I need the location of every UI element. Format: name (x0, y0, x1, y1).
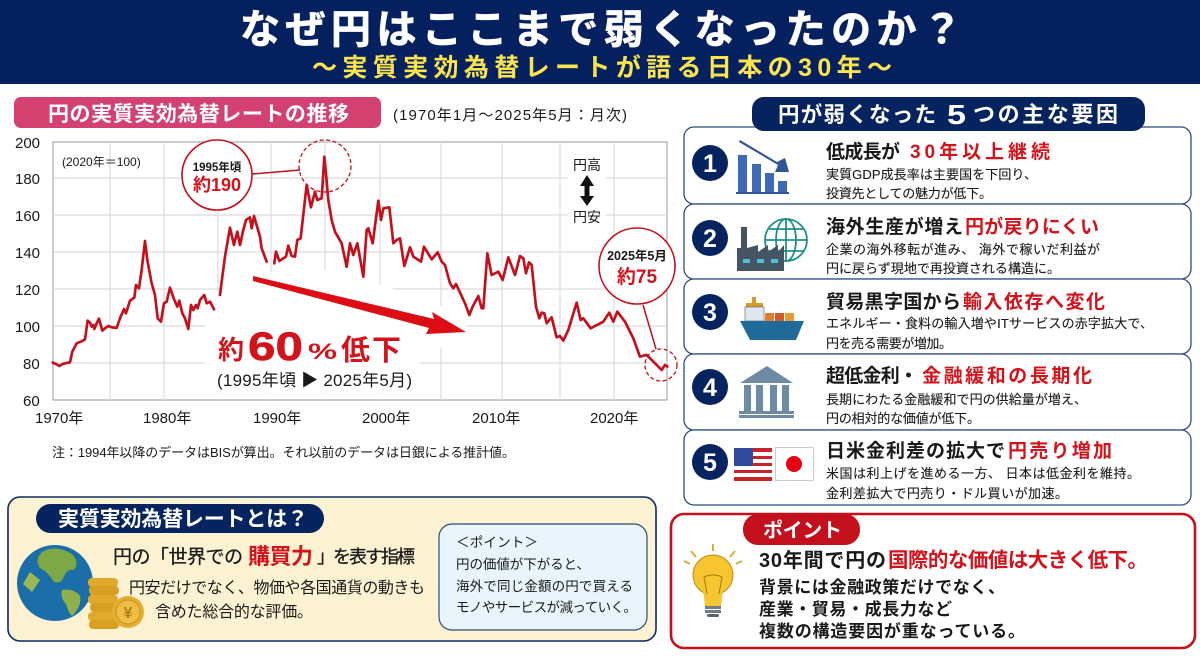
y axis labels: 200 (15, 135, 40, 152)
factor 2: 円に戻らず現地で再投資される構造に。 (826, 261, 1060, 276)
key point text: 国際的な価値は大きく低下。 (888, 549, 1148, 572)
factor 2: 2 (703, 225, 717, 253)
definition text: 円の「世界での (113, 546, 243, 568)
icon: cargo ship (740, 297, 804, 340)
factor 2 (684, 204, 1191, 279)
icon: yen coins (88, 578, 144, 629)
icon: light bulb (684, 544, 742, 617)
factor 3: 3 (703, 299, 717, 327)
callout: 2025 value: 約75 (617, 266, 657, 288)
definition text: 円安だけでなく、物価や各国通貨の動きも (129, 579, 425, 597)
factor 3: エネルギー・食料の輸入増やITサービスの赤字拡大で、 (826, 316, 1153, 331)
y axis labels: 180 (15, 171, 40, 188)
definition text (113, 544, 425, 621)
panel: key point (671, 514, 1195, 648)
y axis labels: 120 (15, 282, 40, 299)
x axis labels: 1970年 (35, 410, 83, 427)
title: なぜ円はここまで弱くなったのか？ (240, 8, 962, 52)
factor 2: 企業の海外移転が進み、 海外で稼いだ利益が (826, 242, 1100, 257)
icon: Japan flag (776, 448, 814, 480)
factor 1: 投資先としての魅力が低下。 (826, 186, 992, 201)
factor 3: 円を売る需要が増加。 (826, 336, 952, 351)
key point text: 背景には金融政策だけでなく、 (759, 577, 1005, 597)
callout: 60 percent drop (217, 325, 412, 390)
y axis labels: 60 (23, 393, 40, 410)
factor 3 (684, 279, 1191, 354)
x axis labels: 1980年 (143, 410, 191, 427)
callout: 2025 value: 2025年5月 (607, 248, 667, 263)
panel: point note (439, 524, 647, 630)
factor 2: 海外生産が増え (826, 215, 963, 238)
callout: 60 percent drop: (1995年頃 ▶ 2025年5月) (217, 371, 412, 390)
factor 4: 超低金利・ (826, 365, 918, 387)
definition text: 購買力 (248, 544, 313, 569)
factor 5 (684, 430, 1191, 505)
key point text: 30年間で円の (759, 549, 886, 572)
callout: 2025 value (599, 228, 677, 381)
chart heading (14, 97, 381, 128)
y axis labels: 80 (23, 356, 40, 373)
panel: five factors heading: 円が弱くなった (778, 102, 936, 127)
panel: point note: ＜ポイント＞ (456, 535, 538, 550)
factor 1: 1 (703, 150, 717, 178)
key point label (743, 514, 860, 545)
callout: 1995 peak: 約190 (193, 175, 241, 195)
factor 4: 4 (703, 374, 717, 402)
icon: bank (739, 366, 794, 418)
factor 5: 円売り増加 (1008, 440, 1112, 462)
definition text: 含めた総合的な評価。 (155, 603, 313, 621)
panel: five factors heading: 5 (947, 99, 966, 130)
factor 3: 貿易黒字国から (826, 291, 961, 313)
yen direction indicator: 円安 (573, 209, 601, 225)
factor 5: 5 (703, 449, 717, 477)
factor 3: 輸入依存へ変化 (963, 291, 1105, 313)
panel: point note: 円の価値が下がると、 (456, 557, 590, 572)
factor 4 (684, 354, 1191, 430)
y axis labels: 100 (15, 319, 40, 336)
x axis labels: 2020年 (590, 410, 638, 427)
icon: yen coins: ¥ (124, 605, 133, 622)
factor 1: 30年以上継続 (910, 140, 1050, 163)
x axis labels: 1990年 (253, 410, 301, 427)
x axis labels (35, 410, 638, 427)
data line (53, 157, 667, 370)
y axis labels: 160 (15, 208, 40, 225)
key point text (759, 549, 1148, 641)
yen direction indicator: 円高 (573, 157, 601, 173)
factor 4: 長期にわたる金融緩和で円の供給量が増え、 (826, 392, 1087, 407)
callout: 60 percent drop: 低下 (341, 334, 401, 367)
factor 1: 低成長が (826, 140, 900, 163)
x axis labels: 2000年 (362, 410, 410, 427)
factor 1: 実質GDP成長率は主要国を下回り、 (826, 167, 1037, 182)
x axis labels: 2010年 (472, 410, 520, 427)
factor 2: 円が戻りにくい (965, 215, 1099, 238)
callout: 1995 peak (182, 140, 351, 210)
definition heading: 実質実効為替レートとは？ (58, 508, 308, 531)
definition text: 」を表す指標 (317, 547, 415, 567)
factor 1 (684, 127, 1191, 204)
panel: definition (8, 497, 656, 641)
icon: US flag (734, 448, 772, 481)
title banner (0, 0, 1200, 84)
callout: 60 percent drop: 約 (218, 335, 244, 365)
y axis labels (15, 135, 40, 410)
subtitle: 〜実質実効為替レートが語る日本の30年〜 (312, 53, 892, 82)
callout: 60 percent drop: % (308, 339, 337, 364)
callout: 60 percent drop: 60 (248, 325, 303, 369)
panel: five factors heading (752, 97, 1145, 131)
yen direction indicator (568, 150, 606, 230)
key point text: 複数の構造要因が重なっている。 (759, 621, 1025, 641)
icon: falling bars (736, 140, 789, 194)
chart heading: 円の実質実効為替レートの推移 (48, 103, 349, 126)
chart period note: (1970年1月〜2025年5月：月次) (393, 107, 627, 124)
factor 5: 米国は利上げを進める一方、 日本は低金利を維持。 (826, 466, 1140, 481)
factor 5: 金利差拡大で円売り・ドル買いが加速。 (826, 486, 1068, 501)
key point text: 産業・貿易・成長力など (759, 599, 952, 619)
callout: 1995 peak: 1995年頃 (193, 160, 242, 174)
panel: point note: モノやサービスが減っていく。 (456, 599, 637, 615)
y axis labels: 140 (15, 245, 40, 262)
factor 4: 円の相対的な価値が低下。 (826, 411, 980, 426)
factor 5: 日米金利差の拡大で (826, 440, 1005, 462)
line chart (15, 135, 677, 427)
icon: globe (17, 545, 93, 621)
panel: point note: 海外で同じ金額の円で買える (456, 579, 633, 594)
chart footnote: 注：1994年以降のデータはBISが算出。それ以前のデータは日銀による推計値。 (52, 445, 515, 460)
base note: (2020年＝100) (62, 155, 141, 169)
factor 4: 金融緩和の長期化 (922, 365, 1092, 387)
definition heading (36, 504, 324, 533)
key point label: ポイント (763, 519, 842, 542)
icon: factory and globe (737, 219, 807, 271)
panel: five factors heading: つの主な要因 (973, 102, 1118, 127)
arrow: downward trend (253, 276, 466, 334)
